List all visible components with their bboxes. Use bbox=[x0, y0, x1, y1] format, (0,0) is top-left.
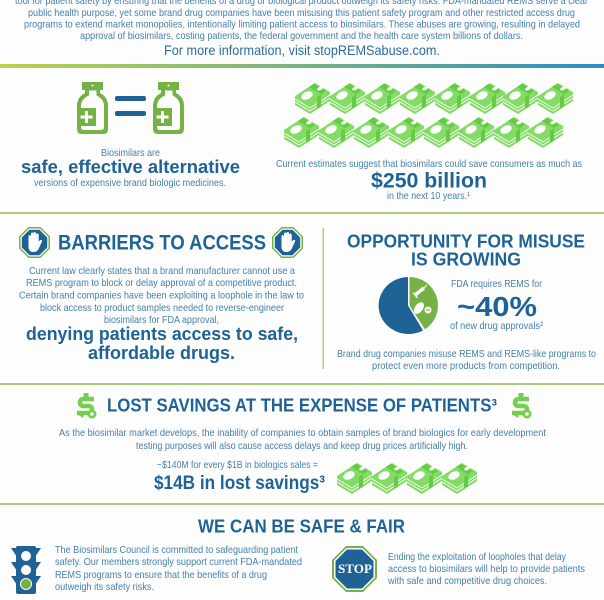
heading: opportunity bbox=[347, 232, 585, 270]
biosimilars text: safe, effective alternative bbox=[21, 157, 240, 177]
safeguarding text: safety. Our members strongly support current FDA-mandated bbox=[55, 556, 302, 568]
panel: barriers to access bbox=[19, 227, 304, 363]
vertical divider bbox=[322, 228, 324, 369]
panel: savings estimate bbox=[276, 83, 582, 202]
safeguarding text: The Biosimilars Council is committed to safeguarding patient bbox=[55, 544, 298, 556]
safeguarding text: REMS programs to ensure that the benefits of a drug bbox=[55, 569, 267, 581]
heading: barriers: BARRIERS TO ACCESS bbox=[58, 232, 266, 254]
savings text bbox=[276, 158, 582, 202]
icon: bottles equal bbox=[77, 82, 184, 134]
opportunity body text bbox=[337, 348, 596, 372]
barriers body text: REMS program to block or delay approval of a competitive product. bbox=[26, 277, 297, 289]
panel: biosimilars bbox=[21, 82, 240, 189]
barriers body text: biosimilars for FDA approval, bbox=[104, 314, 219, 326]
intro text bbox=[15, 0, 588, 42]
barriers callout: denying patients access to safe, bbox=[26, 324, 298, 344]
pie chart bbox=[379, 277, 438, 334]
heading: lost savings: LOST SAVINGS AT THE EXPENSE OF PATIENTS³ bbox=[107, 396, 497, 416]
icon: stop hand left bbox=[19, 227, 50, 258]
biosimilars text: Biosimilars are bbox=[101, 147, 160, 159]
barriers callout bbox=[26, 324, 298, 363]
heading: safe and fair: WE CAN BE SAFE & FAIR bbox=[198, 516, 405, 536]
panel: lost savings bbox=[59, 393, 546, 494]
40 percent stat: FDA requires REMS for bbox=[451, 278, 542, 290]
40 percent stat: of new drug approvals² bbox=[450, 320, 543, 332]
link line: For more information, visit stopREMSabuse.com. bbox=[164, 42, 440, 58]
lost savings stat: $14B in lost savings³ bbox=[154, 473, 325, 494]
lost savings body: testing purposes will also cause access delays and keep drug prices artificially high. bbox=[136, 440, 468, 452]
icon: dollar right bbox=[512, 393, 532, 418]
icon: traffic light bbox=[11, 546, 41, 594]
icon: stop sign bbox=[332, 546, 377, 592]
ending exploitation text: with safe and competitive drug choices. bbox=[387, 575, 547, 587]
icon: money stacks bbox=[284, 83, 573, 148]
divider bbox=[0, 212, 604, 214]
heading: opportunity: IS GROWING bbox=[411, 250, 521, 270]
icon: stop sign: STOP bbox=[338, 561, 372, 576]
intro text: approval of biosimilars, costing patients, the federal government and the health care system billions of dollars. bbox=[80, 30, 523, 42]
biosimilars text: versions of expensive brand biologic medicines. bbox=[34, 177, 226, 189]
heading: opportunity: OPPORTUNITY FOR MISUSE bbox=[347, 232, 585, 252]
barriers callout: affordable drugs. bbox=[88, 343, 235, 363]
safeguarding text: outweigh its safety risks. bbox=[55, 581, 154, 593]
savings text: in the next 10 years.¹ bbox=[387, 190, 470, 202]
panel: opportunity for misuse bbox=[337, 232, 596, 372]
40 percent stat bbox=[450, 278, 543, 332]
40 percent stat: ~40% bbox=[457, 291, 537, 322]
safeguarding text bbox=[55, 544, 302, 593]
barriers body text: block access to product samples needed to reverse-engineer bbox=[40, 302, 284, 314]
opportunity body text: protect even more products from competition. bbox=[372, 360, 560, 372]
barriers body text bbox=[19, 265, 304, 326]
lost savings body bbox=[59, 427, 546, 452]
barriers body text: Current law clearly states that a brand manufacturer cannot use a bbox=[29, 265, 295, 277]
lost savings body: As the biosimilar market develops, the inability of companies to obtain samples of brand biologics for early development bbox=[59, 427, 546, 439]
divider bbox=[0, 503, 604, 505]
lost savings stat bbox=[154, 459, 325, 494]
biosimilars text bbox=[21, 147, 240, 189]
ending exploitation text: Ending the exploitation of loopholes that delay bbox=[388, 551, 567, 563]
icon: dollar left bbox=[77, 393, 96, 418]
savings text: $250 billion bbox=[371, 170, 487, 192]
barriers body text: Certain brand companies have been exploiting a loophole in the law to bbox=[19, 290, 304, 302]
gradient divider bbox=[0, 64, 604, 68]
lost savings stat: ~$140M for every $1B in biologics sales = bbox=[157, 459, 318, 471]
icon: money stacks small bbox=[337, 463, 477, 494]
divider bbox=[0, 383, 604, 385]
icon: stop hand right bbox=[272, 227, 303, 258]
ending exploitation text bbox=[387, 551, 585, 587]
